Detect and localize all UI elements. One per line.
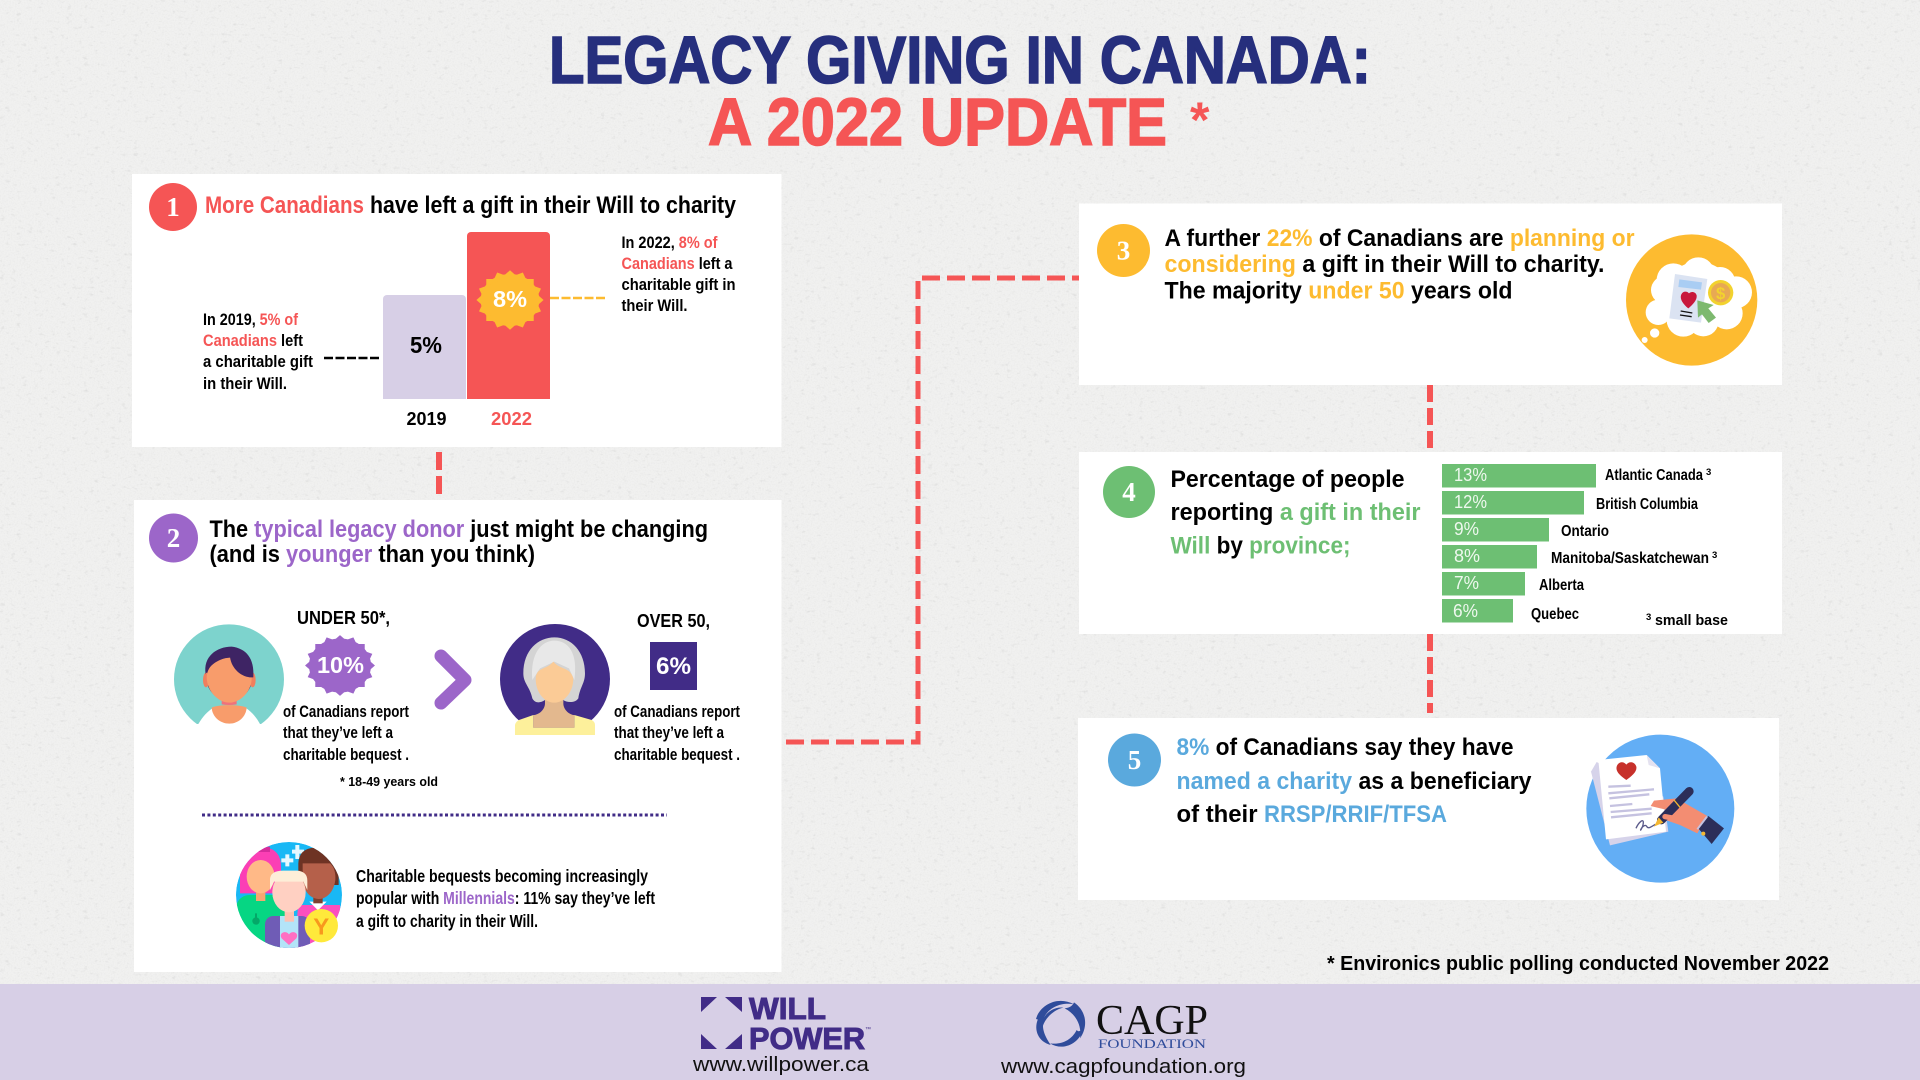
bar: Alberta: Alberta bbox=[1539, 577, 1584, 594]
callout 2022: charitable gift in bbox=[622, 276, 736, 294]
panel 5: named a charity bbox=[1078, 718, 1779, 900]
number badge 2 bbox=[149, 514, 198, 562]
dash: 2019 callout leader bbox=[324, 357, 380, 359]
badge 6%: 6% bbox=[656, 653, 691, 680]
callout 2022 bbox=[622, 234, 736, 315]
callout 2019 bbox=[203, 311, 313, 393]
text: under 50 stat: charitable bequest . bbox=[283, 746, 409, 764]
text 3 bbox=[1164, 225, 1635, 304]
badge 6% bbox=[650, 642, 697, 690]
text 5: named a charity as a beneficiary bbox=[1176, 768, 1532, 795]
text 4: Percentage of people bbox=[1170, 466, 1404, 493]
text 5: RRSP/RRIF/TFSA bbox=[1264, 801, 1447, 828]
text 4: Will by province; bbox=[1170, 532, 1350, 560]
callout 2022: Canadians left a bbox=[622, 255, 733, 273]
starburst 10%: 10% bbox=[317, 652, 364, 678]
text: under 50 stat bbox=[283, 703, 409, 764]
logo: CAGP Foundation: FOUNDATION bbox=[1098, 1036, 1207, 1051]
text 4 bbox=[1170, 466, 1421, 560]
number badge 5 bbox=[1108, 734, 1161, 786]
starburst 8% bbox=[476, 270, 544, 330]
label: under 50: UNDER 50*, bbox=[297, 608, 390, 628]
number badge 2: 2 bbox=[167, 523, 180, 553]
title: A 2022 UPDATE bbox=[708, 85, 1167, 160]
heading 2: (and is younger than you think) bbox=[210, 541, 535, 568]
heading 1: have left a gift in their Will to charity bbox=[370, 192, 737, 219]
title bbox=[549, 23, 1371, 160]
text: millennials: a gift to charity in their Will. bbox=[356, 911, 538, 931]
bar: Alberta bbox=[1442, 572, 1584, 596]
number badge 5: 5 bbox=[1128, 745, 1141, 775]
text: over 50 stat: of Canadians report bbox=[614, 703, 740, 721]
number badge 4 bbox=[1103, 466, 1155, 518]
logo: CAGP Foundation bbox=[1000, 998, 1246, 1078]
title: * bbox=[1190, 92, 1210, 148]
bar 2019 bbox=[383, 295, 466, 399]
heading 1 bbox=[205, 192, 737, 219]
callout 2019: Canadians left bbox=[203, 332, 303, 350]
footer band bbox=[0, 984, 1920, 1080]
bar: Manitoba/Saskatchewan: 3 bbox=[1712, 550, 1717, 561]
logo: Will Power: WILL bbox=[749, 991, 826, 1026]
logo: CAGP Foundation: www.cagpfoundation.org bbox=[1000, 1056, 1246, 1078]
axis label 2019: 2019 bbox=[406, 408, 446, 429]
icon: older donor avatar bbox=[500, 624, 610, 735]
bar 2022 bbox=[467, 232, 550, 399]
number badge 4: 4 bbox=[1122, 477, 1136, 507]
text 3: A further 22% of Canadians are planning or bbox=[1164, 225, 1635, 252]
text: under 50 stat: of Canadians report bbox=[283, 703, 409, 721]
bar: Ontario: 9% bbox=[1454, 519, 1479, 539]
callout 2019: In 2019, 5% of bbox=[203, 311, 298, 329]
bar: Manitoba/Saskatchewan: 8% bbox=[1454, 546, 1480, 566]
title: LEGACY GIVING IN CANADA: bbox=[549, 23, 1371, 98]
text 5: of their bbox=[1176, 801, 1258, 828]
logo: Will Power: www.willpower.ca bbox=[692, 1054, 870, 1076]
text: millennials bbox=[356, 866, 655, 931]
icon: millennials group bbox=[236, 842, 343, 953]
connector: panel 3 to panel 4 bbox=[1427, 385, 1433, 452]
text: under 50 stat: that they’ve left a bbox=[283, 724, 394, 742]
callout 2022: In 2022, 8% of bbox=[622, 234, 718, 252]
connector: panel 2 to panel 3 bbox=[786, 278, 1079, 742]
text 4: reporting a gift in their bbox=[1170, 499, 1421, 526]
bar: Manitoba/Saskatchewan: Manitoba/Saskatchewan bbox=[1551, 550, 1709, 567]
icon: thought bubble bbox=[1626, 234, 1757, 366]
logo: Will Power: ™ bbox=[865, 1026, 871, 1033]
icon: young donor avatar bbox=[174, 624, 284, 734]
bar: Alberta: 7% bbox=[1454, 573, 1479, 593]
label: over 50: OVER 50, bbox=[637, 611, 710, 631]
bar: Quebec bbox=[1442, 599, 1579, 623]
connector: panel 1 to panel 2 bbox=[436, 452, 442, 495]
dash: 2022 callout leader bbox=[550, 297, 607, 299]
bar: Atlantic Canada: Atlantic Canada bbox=[1605, 467, 1703, 484]
logo: Will Power bbox=[692, 991, 871, 1076]
value 5%: 5% bbox=[410, 332, 442, 358]
starburst 10% bbox=[305, 635, 375, 696]
text 5: 8% of Canadians say they have bbox=[1176, 734, 1514, 761]
number badge 3: 3 bbox=[1117, 236, 1130, 266]
starburst 8%: 8% bbox=[493, 286, 527, 312]
panel 4: by province bbox=[1079, 452, 1782, 634]
connector: panel 4 to panel 5 bbox=[1427, 634, 1433, 713]
text: millennials: popular with Millennials: 11% say they’ve left bbox=[356, 888, 655, 908]
icon: millennials group: Y bbox=[313, 913, 330, 939]
bar chart: provinces bbox=[1442, 464, 1717, 623]
bar: British Columbia: 12% bbox=[1454, 492, 1487, 512]
bar: Manitoba/Saskatchewan bbox=[1442, 545, 1717, 568]
text: over 50 stat: that they’ve left a bbox=[614, 724, 725, 742]
text: over 50 stat: charitable bequest . bbox=[614, 746, 740, 764]
panel 3: planning or considering bbox=[1079, 204, 1782, 385]
footnote: age range: * 18-49 years old bbox=[340, 775, 438, 789]
heading 2 bbox=[210, 516, 708, 568]
logo: Will Power: POWER bbox=[749, 1021, 865, 1056]
bar: British Columbia: British Columbia bbox=[1596, 496, 1698, 513]
arrow: greater than chevron bbox=[441, 656, 465, 703]
bar: British Columbia bbox=[1442, 491, 1698, 514]
number badge 1 bbox=[149, 183, 197, 231]
panel 1: more Canadians bbox=[132, 174, 782, 447]
axis label 2022: 2022 bbox=[491, 408, 532, 429]
bar: Quebec: 6% bbox=[1453, 601, 1478, 621]
text 3: The majority under 50 years old bbox=[1164, 278, 1512, 304]
bar: Ontario bbox=[1442, 518, 1609, 542]
icon: signing a will bbox=[1586, 735, 1734, 883]
panel 2: typical legacy donor bbox=[134, 500, 782, 972]
bar: Atlantic Canada: 3 bbox=[1706, 467, 1711, 478]
text: millennials: Charitable bequests becoming increasingly bbox=[356, 866, 648, 886]
callout 2019: a charitable gift bbox=[203, 353, 313, 371]
bar: Ontario: Ontario bbox=[1561, 523, 1609, 540]
note: small base: small base bbox=[1655, 613, 1728, 629]
callout 2022: their Will. bbox=[622, 297, 688, 315]
callout 2019: in their Will. bbox=[203, 375, 287, 393]
text 3: considering a gift in their Will to charity. bbox=[1164, 251, 1604, 278]
number badge 1: 1 bbox=[166, 192, 180, 222]
footnote: polling source: * Environics public polling conducted November 2022 bbox=[1327, 952, 1829, 975]
bar: Atlantic Canada bbox=[1442, 464, 1711, 488]
heading 1: More Canadians bbox=[205, 192, 364, 219]
bar: Atlantic Canada: 13% bbox=[1454, 465, 1487, 485]
text: over 50 stat bbox=[614, 703, 740, 764]
note: small base: 3 bbox=[1646, 612, 1651, 623]
logo: CAGP Foundation: CAGP bbox=[1096, 998, 1208, 1044]
heading 2: The typical legacy donor just might be changing bbox=[210, 516, 708, 543]
bar: Quebec: Quebec bbox=[1531, 606, 1579, 623]
icon: thought bubble: $ bbox=[1716, 284, 1726, 303]
number badge 3 bbox=[1097, 224, 1150, 277]
text 5 bbox=[1176, 734, 1532, 828]
